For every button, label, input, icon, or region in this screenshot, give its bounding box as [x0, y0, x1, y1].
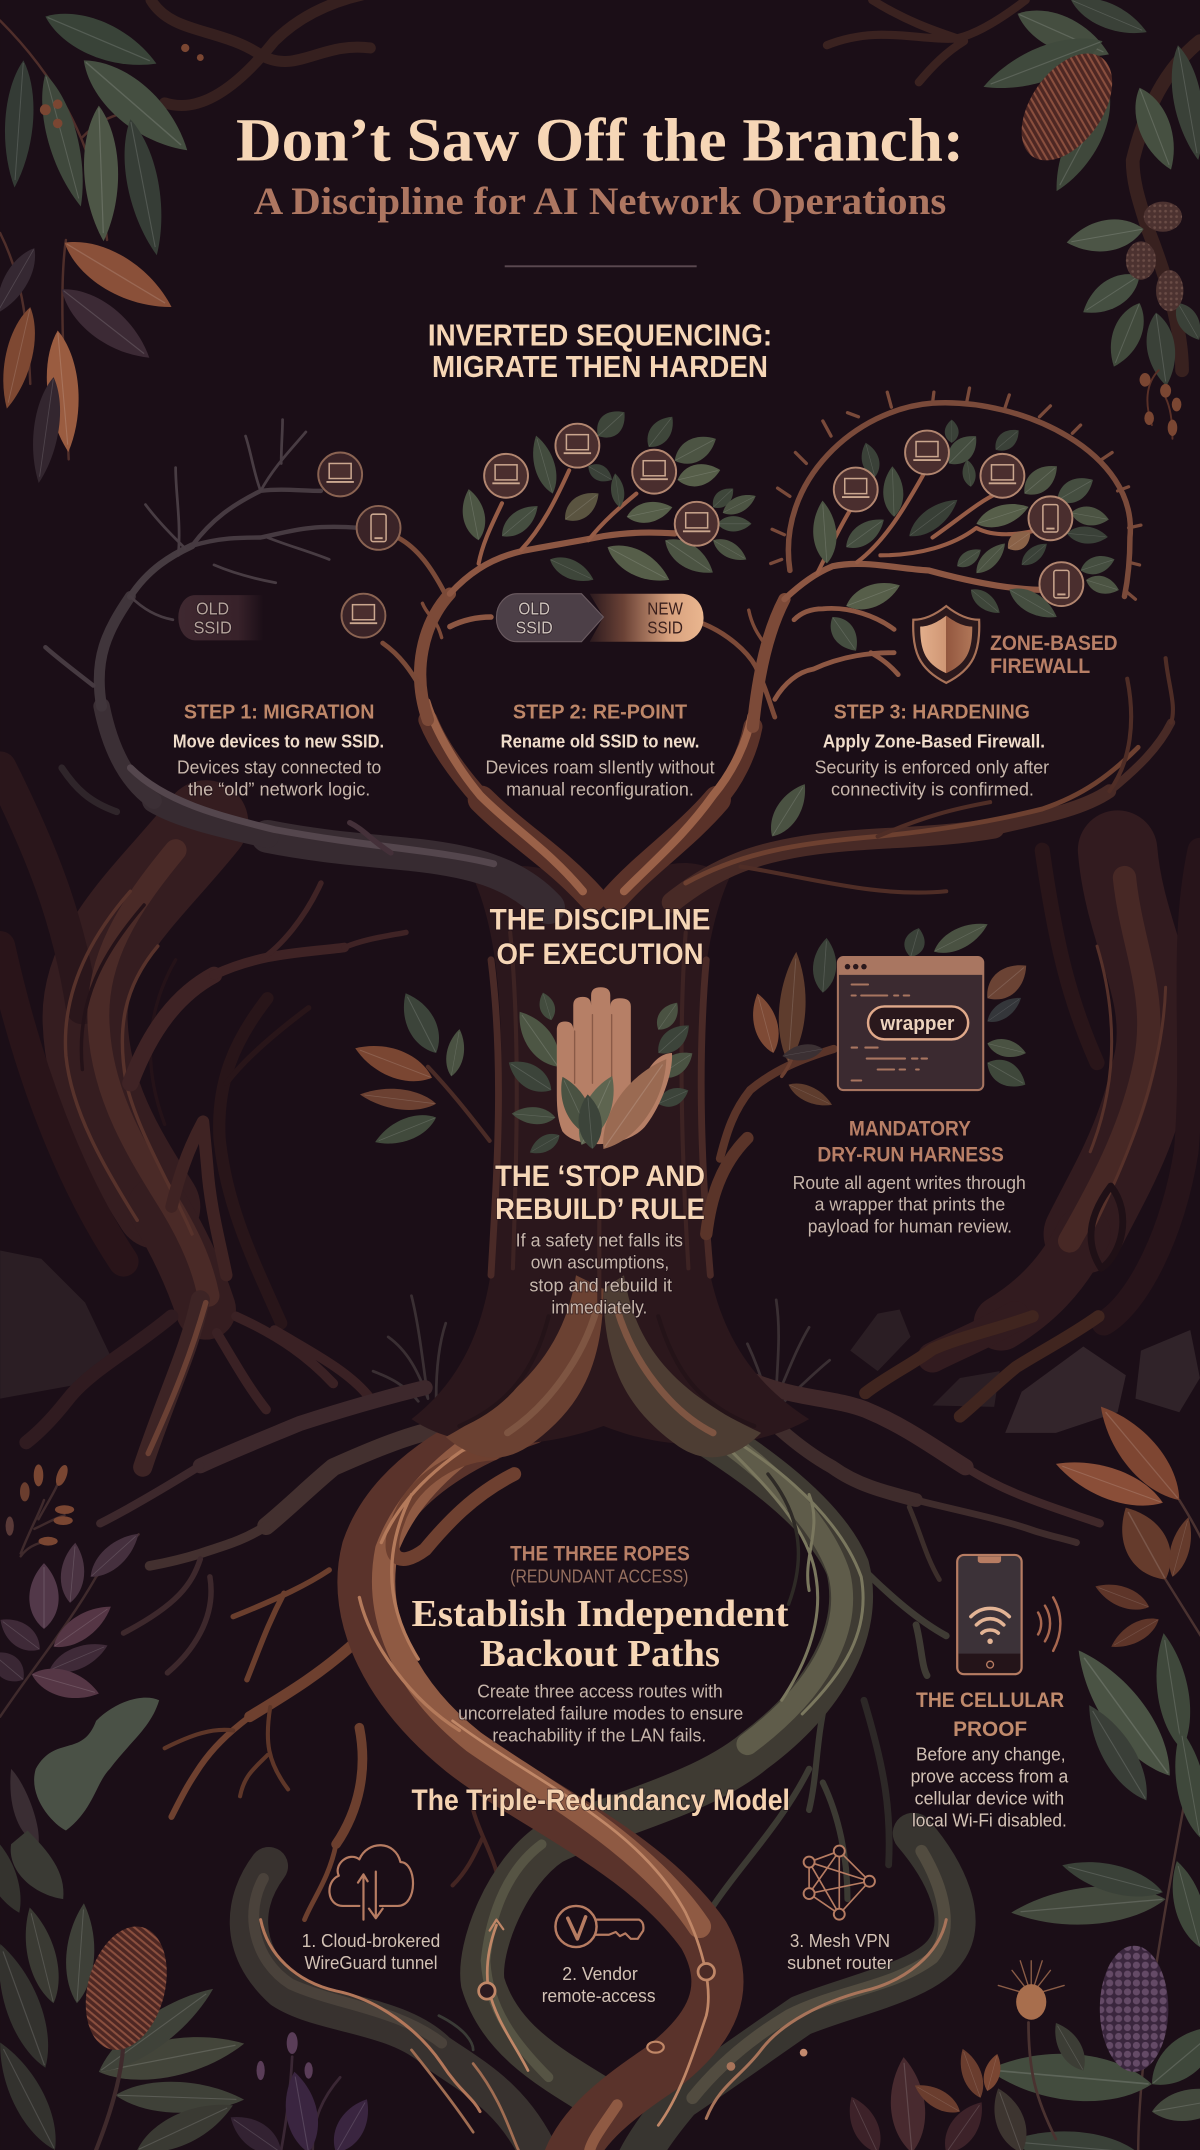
text: three ropes: uncorrelated failure modes to ensure [458, 1702, 743, 1723]
text: three ropes: reachability if the LAN fails. [492, 1724, 706, 1745]
old SSID pill: step 1 [178, 595, 263, 640]
label: cloud-brokered tunnel: WireGuard tunnel [305, 1952, 438, 1973]
bottom-left foliage [0, 1463, 378, 2150]
text: three ropes: Establish Independent [411, 1593, 789, 1635]
heading: discipline of execution [490, 904, 710, 971]
text: stop and rebuild rule: own ascumptions, [531, 1251, 669, 1272]
rocks [0, 1251, 1200, 1433]
text: step 2: STEP 2: RE-POINT [513, 700, 687, 723]
top-right foliage [827, 0, 1200, 439]
icon: raised hand with leaves [502, 987, 698, 1159]
grass tufts [373, 1296, 830, 1401]
heading: inverted sequencing [428, 320, 772, 384]
label: mesh VPN: subnet router [787, 1952, 893, 1973]
old to new SSID pill: step 2: OLD [518, 598, 550, 618]
title [236, 106, 964, 223]
text: mandatory dry-run harness: MANDATORY [849, 1116, 971, 1140]
old SSID pill: step 1: OLD [196, 598, 229, 618]
branch: right outer limb [672, 658, 1173, 902]
icon: cellular phone [957, 1555, 1060, 1674]
branch: step 2 copper limb [383, 470, 675, 898]
icon: terminal window with wrapper [838, 957, 983, 1090]
text: cellular proof: Before any change, [916, 1744, 1066, 1765]
text: stop and rebuild rule: REBUILD’ RULE [495, 1193, 705, 1226]
text: cellular proof: local Wi-Fi disabled. [912, 1809, 1067, 1830]
text: cellular proof [911, 1688, 1069, 1830]
central trunk [411, 863, 809, 1458]
label: mesh VPN [787, 1930, 893, 1973]
text: mandatory dry-run harness: DRY-RUN HARNESS [817, 1142, 1004, 1166]
foliage: step 3 leaves [762, 420, 1121, 843]
text: step 2 [486, 700, 715, 799]
text: step 1: Move devices to new SSID. [173, 730, 384, 751]
root: left loop rope [249, 1866, 542, 2150]
heading: inverted sequencing: INVERTED SEQUENCING: [428, 320, 772, 353]
text: three ropes: Create three access routes with [477, 1681, 723, 1702]
text: cellular proof: THE CELLULAR [916, 1688, 1064, 1712]
old SSID pill: step 1: SSID [193, 617, 232, 637]
firewall label: FIREWALL [990, 654, 1090, 678]
icon: mesh network [804, 1846, 875, 1920]
text: step 2: Rename old SSID to new. [501, 730, 699, 751]
text: three ropes: THE THREE ROPES [510, 1541, 690, 1565]
thorn arch [771, 388, 1141, 599]
old to new SSID pill: step 2: SSID [647, 617, 683, 637]
text: step 3: connectivity is confirmed. [831, 778, 1034, 799]
text: step 3: STEP 3: HARDENING [834, 700, 1030, 723]
title: Don’t Saw Off the Branch: [236, 106, 964, 174]
background tree: right [865, 850, 1200, 1416]
label: vendor remote access: remote-access [542, 1985, 656, 2006]
heading: discipline of execution: OF EXECUTION [496, 938, 704, 971]
text: stop and rebuild rule: stop and rebuild it [529, 1275, 673, 1296]
branch: step 1 dead grey limb [45, 420, 549, 908]
old to new SSID pill: step 2: NEW [647, 598, 684, 618]
sprig: behind wrapper [706, 915, 1035, 1234]
text: step 3: Security is enforced only after [815, 756, 1049, 777]
text: step 1: STEP 1: MIGRATION [184, 700, 374, 723]
label: vendor remote access: 2. Vendor [562, 1963, 638, 1984]
text: three ropes [411, 1541, 789, 1745]
label: cloud-brokered tunnel [302, 1930, 440, 1973]
text: stop and rebuild rule: THE ‘STOP AND [495, 1160, 705, 1193]
firewall label [990, 631, 1118, 678]
branch: step 3 copper limb [422, 473, 1064, 898]
foliage: step 2 leaves [458, 404, 759, 591]
sprig: left of trunk [350, 987, 490, 1152]
icon: terminal window with wrapper: wrapper [879, 1012, 954, 1035]
old to new SSID pill: step 2 [496, 594, 704, 642]
text: stop and rebuild rule: If a safety net falls its [516, 1229, 683, 1250]
label: mesh VPN: 3. Mesh VPN [790, 1930, 890, 1951]
background tree: left root fan [26, 1300, 370, 1467]
text: cellular proof: prove access from a [911, 1766, 1069, 1787]
icon: vendor key [555, 1906, 643, 1947]
text: mandatory dry-run harness: Route all agent writes through [793, 1172, 1026, 1193]
old to new SSID pill: step 2: SSID [516, 617, 553, 637]
text: cellular proof: cellular device with [915, 1787, 1064, 1808]
text: step 2: Devices roam slIently without [486, 756, 715, 777]
title divider [505, 265, 697, 267]
root: right loop rope [638, 1833, 955, 2150]
roots: side roots [100, 1333, 1100, 1920]
text: mandatory dry-run harness: payload for human review. [808, 1216, 1012, 1237]
text: stop and rebuild rule: immediately. [551, 1297, 647, 1318]
firewall shield icon [913, 606, 979, 683]
text: step 1: Devices stay connected to [177, 756, 381, 777]
device nodes: step 3 [834, 431, 1083, 606]
text: cellular proof: PROOF [953, 1717, 1027, 1741]
background tree: left [0, 768, 406, 1323]
text: stop and rebuild rule [495, 1160, 705, 1318]
root: copper strand [359, 1412, 717, 2150]
root: olive strand [479, 1412, 863, 2105]
bottom-right foliage [840, 1395, 1200, 2150]
label: vendor remote access [542, 1963, 656, 2006]
device nodes: step 1 [318, 452, 400, 638]
heading: inverted sequencing: MIGRATE THEN HARDEN [432, 351, 768, 384]
firewall label: ZONE-BASED [990, 631, 1118, 655]
text: mandatory dry-run harness [793, 1116, 1026, 1237]
text: step 1: the “old” network logic. [188, 778, 370, 799]
text: three ropes: Backout Paths [480, 1633, 720, 1675]
heading: triple-redundancy model: The Triple-Redundancy Model [411, 1784, 790, 1817]
text: step 3 [815, 700, 1049, 799]
icon: cloud tunnel [329, 1845, 413, 1920]
device nodes: step 2 [484, 424, 719, 546]
title: A Discipline for AI Network Operations [254, 180, 946, 223]
text: three ropes: (REDUNDANT ACCESS) [510, 1565, 688, 1586]
top-left foliage [0, 0, 370, 485]
text: step 2: manual reconfiguration. [506, 778, 694, 799]
text: step 1 [173, 700, 384, 799]
heading: discipline of execution: THE DISCIPLINE [490, 904, 710, 937]
text: mandatory dry-run harness: a wrapper that prints the [815, 1194, 1005, 1215]
text: step 3: Apply Zone-Based Firewall. [823, 730, 1045, 751]
label: cloud-brokered tunnel: 1. Cloud-brokered [302, 1930, 440, 1951]
